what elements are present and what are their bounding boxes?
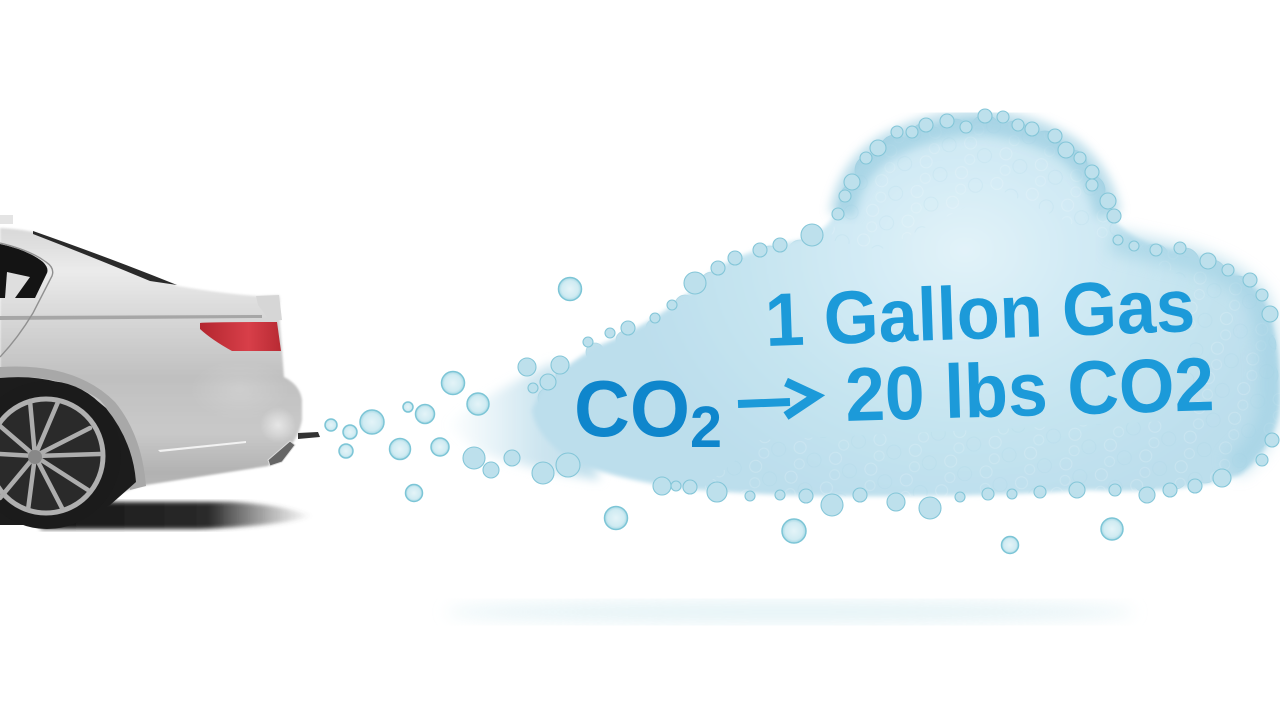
text: 20 lbs CO2: 20 lbs CO2 <box>844 342 1215 438</box>
rim bubble fill layer <box>538 115 1278 492</box>
exhaust tip <box>268 441 295 466</box>
cloud tail haze <box>445 362 600 480</box>
darker rim shading <box>842 122 1108 215</box>
car <box>0 215 320 529</box>
wheel <box>0 381 121 529</box>
body highlight <box>190 360 290 420</box>
character line <box>0 315 262 320</box>
text: CO2 formula: CO <box>574 364 690 453</box>
ground shadow under cloud <box>445 601 1135 623</box>
cloud body <box>532 118 1280 496</box>
boot dark edge <box>33 231 177 285</box>
car ground shadow <box>40 502 312 529</box>
tyre <box>0 381 121 529</box>
car body <box>0 228 302 500</box>
cloud bubble texture <box>700 118 1280 496</box>
text: CO2 formula: 2 <box>690 395 722 460</box>
window chrome and door line <box>0 243 53 357</box>
edge bubbles <box>463 109 1279 519</box>
spoiler edge <box>256 295 282 321</box>
rim <box>0 399 103 513</box>
CO2 cloud <box>325 109 1280 554</box>
rear bumper highlight <box>260 407 296 443</box>
lower trim line <box>158 441 246 452</box>
tail light <box>200 322 281 351</box>
exhaust pipe <box>298 432 320 439</box>
text: 1 Gallon Gas: 1 Gallon Gas <box>764 263 1196 362</box>
car roof accessory <box>0 215 13 224</box>
rear side window <box>0 244 48 298</box>
headline <box>764 263 1215 438</box>
hub <box>28 450 42 464</box>
wheel arch lip <box>0 366 146 490</box>
wheel arch <box>0 377 136 525</box>
window glass <box>5 272 30 298</box>
arrow <box>738 382 816 416</box>
drifting CO2 bubbles <box>325 278 1123 554</box>
spokes <box>0 401 100 510</box>
